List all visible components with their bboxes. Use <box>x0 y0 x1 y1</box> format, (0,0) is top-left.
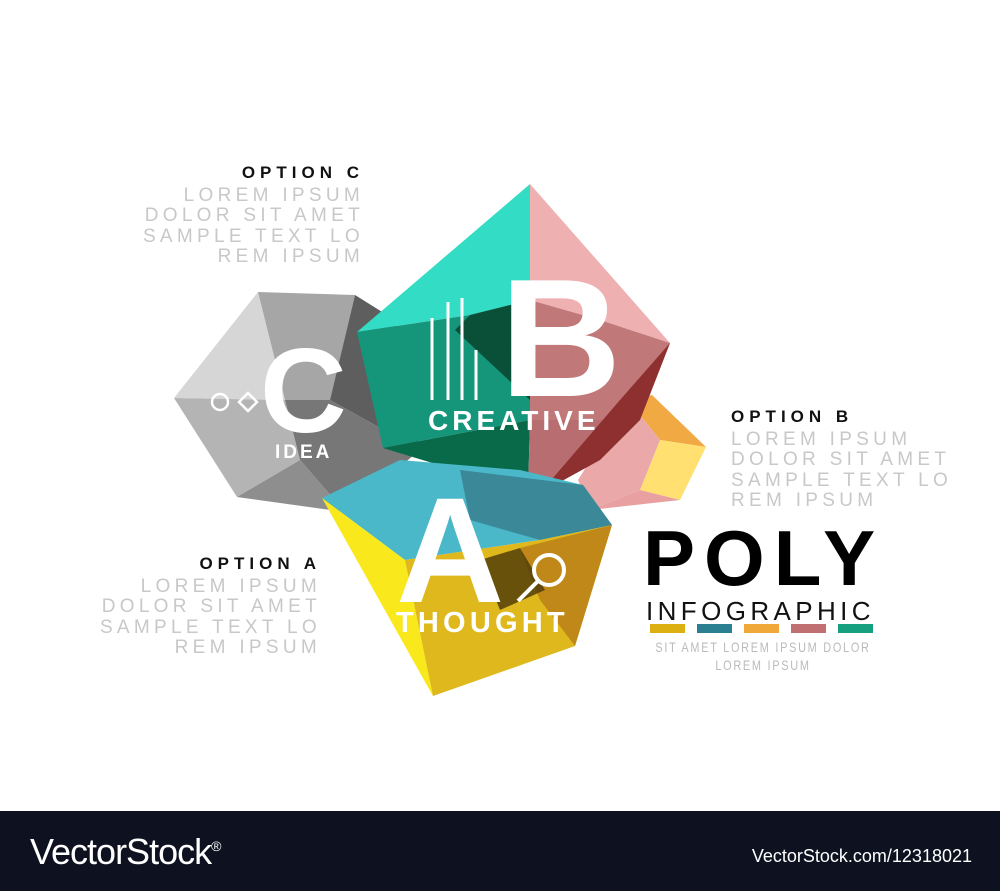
text: option A: DOLOR SIT AMET <box>102 596 321 617</box>
text: option A: OPTION A <box>199 554 321 573</box>
text: option C: SAMPLE TEXT LO <box>143 226 364 247</box>
letter A: A <box>396 466 504 634</box>
shape: gray hexagon C <box>174 292 420 512</box>
text: option A: LOREM IPSUM <box>141 576 321 597</box>
text: option C: LOREM IPSUM <box>184 185 364 206</box>
icon: circle and diamond <box>212 393 257 411</box>
icon: magnifier <box>518 555 564 601</box>
title: POLY INFOGRAPHIC <box>643 514 884 673</box>
icon: vertical lines <box>432 298 476 400</box>
text: option B: REM IPSUM <box>731 490 877 511</box>
text: option A <box>100 554 321 658</box>
text: option C: REM IPSUM <box>218 246 364 267</box>
text: option B <box>731 407 952 511</box>
letter B: B <box>500 244 621 432</box>
subtext <box>655 639 871 673</box>
text: option C <box>143 163 364 267</box>
shape: pentagon B <box>357 184 670 493</box>
text: option B: LOREM IPSUM <box>731 429 911 450</box>
text: option A: REM IPSUM <box>175 637 321 658</box>
text: option C: OPTION C <box>242 163 364 182</box>
text: option B: DOLOR SIT AMET <box>731 449 950 470</box>
text: option B: SAMPLE TEXT LO <box>731 470 952 491</box>
label CREATIVE: CREATIVE <box>428 405 600 436</box>
label IDEA: IDEA <box>275 442 332 463</box>
subtext: LOREM IPSUM <box>715 657 811 673</box>
shape: orange hexagon <box>578 395 706 510</box>
subtext: SIT AMET LOREM IPSUM DOLOR <box>655 639 871 655</box>
text: option B: OPTION B <box>731 407 853 426</box>
title: POLY INFOGRAPHIC: POLY <box>643 514 884 602</box>
color bars <box>650 624 873 633</box>
footer bar <box>0 811 1000 891</box>
text: option A: SAMPLE TEXT LO <box>100 617 321 638</box>
title: POLY INFOGRAPHIC: INFOGRAPHIC <box>646 596 875 626</box>
footer url: VectorStock.com/12318021 <box>752 846 972 866</box>
shape: pentagon A <box>322 460 612 696</box>
footer logo: VectorStock® <box>30 831 220 872</box>
text: option C: DOLOR SIT AMET <box>145 205 364 226</box>
label THOUGHT: THOUGHT <box>396 607 569 639</box>
letter C: C <box>260 324 347 458</box>
